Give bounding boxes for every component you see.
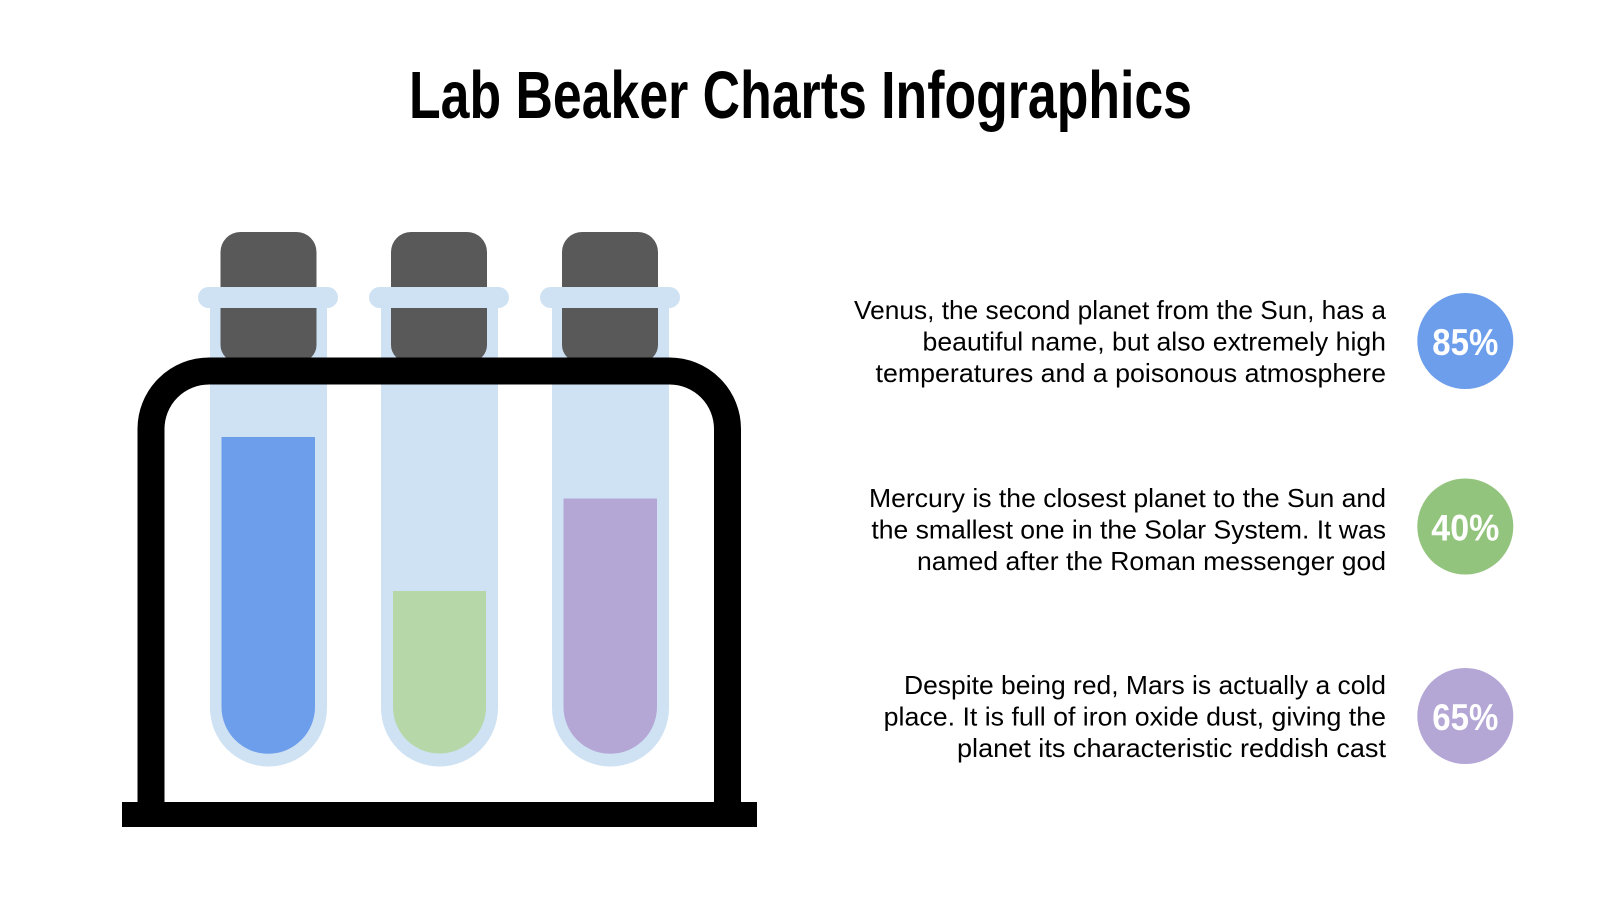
rack base — [122, 802, 757, 827]
item 2: Mercury — [869, 478, 1513, 576]
text block: Mercury: named after the Roman messenger god — [917, 546, 1386, 576]
text block: Mercury: Mercury is the closest planet to the Sun and — [869, 483, 1386, 513]
test tube 3: 65% purple — [540, 232, 680, 767]
item 1: Venus — [854, 293, 1513, 389]
badge: 85% — [1417, 293, 1513, 389]
test tube 1: 85% blue — [198, 232, 338, 767]
text block: Mars — [884, 670, 1387, 763]
text block: Mars: Despite being red, Mars is actually a cold — [904, 670, 1386, 700]
text block: Venus: temperatures and a poisonous atmosphere — [876, 358, 1386, 388]
text block: Mars: place. It is full of iron oxide dust, giving the — [884, 702, 1386, 732]
badge: 40% — [1417, 478, 1513, 574]
item 3: Mars — [884, 668, 1513, 764]
badge: 65%: 65% — [1432, 697, 1498, 738]
badge: 40%: 40% — [1431, 508, 1499, 548]
text block: Venus: beautiful name, but also extremely high — [922, 326, 1386, 356]
rack frame — [151, 371, 728, 827]
text block: Mercury — [869, 483, 1386, 576]
text block: Venus: Venus, the second planet from the Sun, has a — [854, 295, 1387, 325]
text block: Mercury: the smallest one in the Solar System. It was — [871, 514, 1386, 544]
test tube 2: 40% green — [369, 232, 509, 767]
badge: 65% — [1417, 668, 1513, 764]
text block: Venus — [854, 295, 1387, 388]
text block: Mars: planet its characteristic reddish cast — [957, 733, 1387, 763]
badge: 85%: 85% — [1432, 322, 1498, 363]
illustration: test tube rack — [122, 232, 757, 827]
title: Lab Beaker Charts Infographics — [409, 58, 1192, 133]
